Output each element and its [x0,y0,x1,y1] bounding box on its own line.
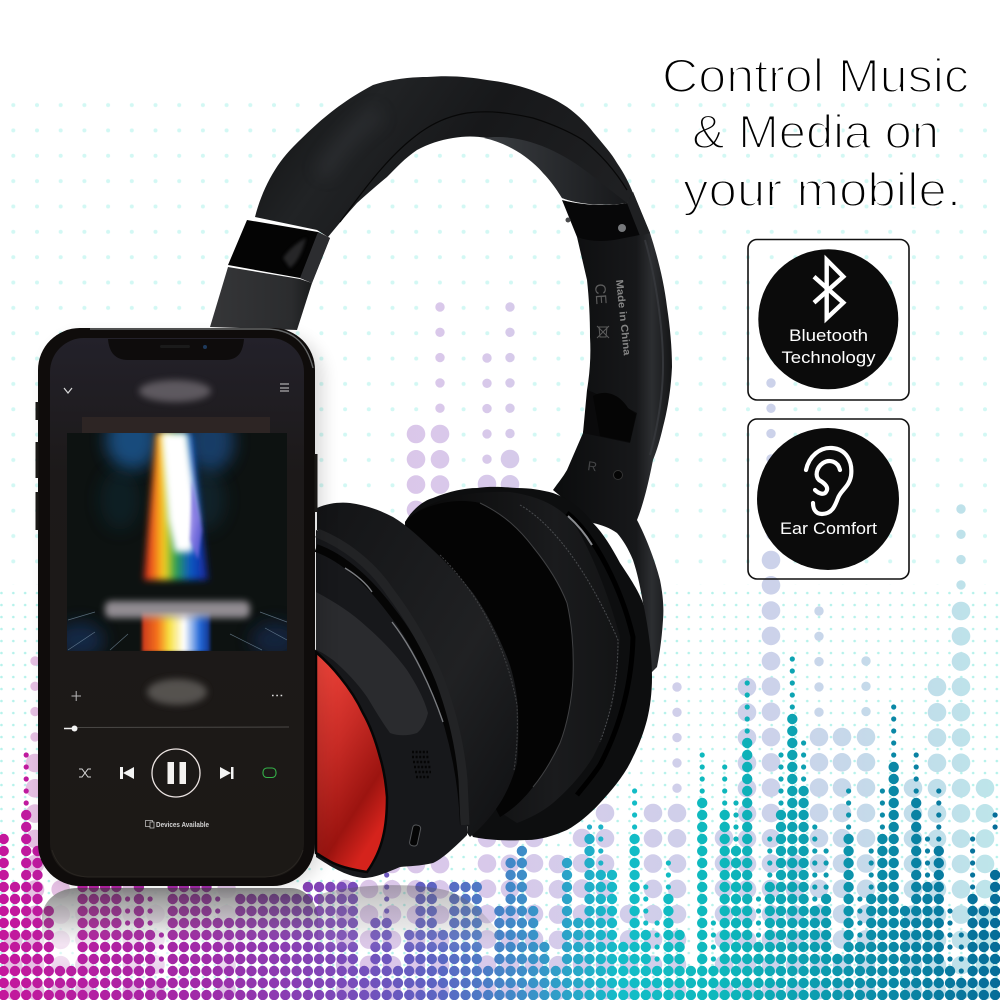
badge: ear comfort [748,419,909,579]
hinge screw [614,470,622,480]
devices label [146,820,209,829]
more dots [272,694,283,696]
play/pause button [152,749,200,797]
right arm and yoke [553,233,672,677]
icon: bluetooth [814,260,843,318]
album art [67,433,287,651]
blurred artist line [147,679,207,705]
devices label: Devices Available [156,822,209,829]
R side mark: R [587,458,598,474]
logo text on arm: Made in China [613,279,632,356]
repeat icon [263,768,276,778]
rear cup silhouette [400,487,652,840]
badge: bluetooth technology [748,240,909,400]
title line 1: Control Music [662,49,969,102]
headband sheen [322,113,380,175]
grey slider [210,267,312,330]
badge text: Ear Comfort [780,519,877,538]
front cup gloss ring [316,548,464,825]
cushion textured rim [317,533,465,825]
camera [203,345,207,349]
shuffle icon [79,769,91,777]
glossy slider block [228,220,330,283]
badge text: Bluetooth [789,326,868,345]
phone and headphone reflection: grey overlay [42,885,497,955]
blurred album caption [105,601,250,618]
blurred top title [139,380,211,402]
phone shadow [44,334,324,886]
notch [108,339,244,360]
collar with screws [562,192,650,241]
screen [50,338,304,877]
front leather cushion [317,503,518,837]
red ear cup plate [316,652,387,872]
WEEE mark [597,326,609,338]
plus icon [72,691,81,701]
front cup housing [316,530,467,878]
next button [220,767,234,779]
phone [37,328,324,886]
side buttons [37,402,316,530]
progress bar [64,726,289,732]
control arm over cup [316,592,428,735]
headphones [210,76,672,878]
headband underside [484,137,627,205]
album header bar [82,417,270,433]
phone bottom bezel edge [52,850,303,877]
previous button [120,767,134,779]
background: pale lilac dot columns [13,307,985,1000]
headband cushion [255,76,633,237]
rear cushion centre [405,501,573,817]
equalizer: gradient dot columns [4,659,995,1000]
chevron [64,388,72,393]
CE mark on arm: CE [591,283,609,305]
phone reflection: light wash behind dots [40,888,318,985]
icon: ear [806,448,851,514]
badge: bluetooth technology: Technology [782,348,876,367]
headband stitch line [340,112,627,222]
title line 2: & Media on [692,105,939,158]
usb port [409,824,421,847]
queue icon [280,384,289,391]
rear cushion outer band [405,492,620,823]
title [662,49,969,216]
phone body [38,328,315,886]
title line 3: your mobile. [683,163,961,216]
speaker grille [412,752,431,777]
